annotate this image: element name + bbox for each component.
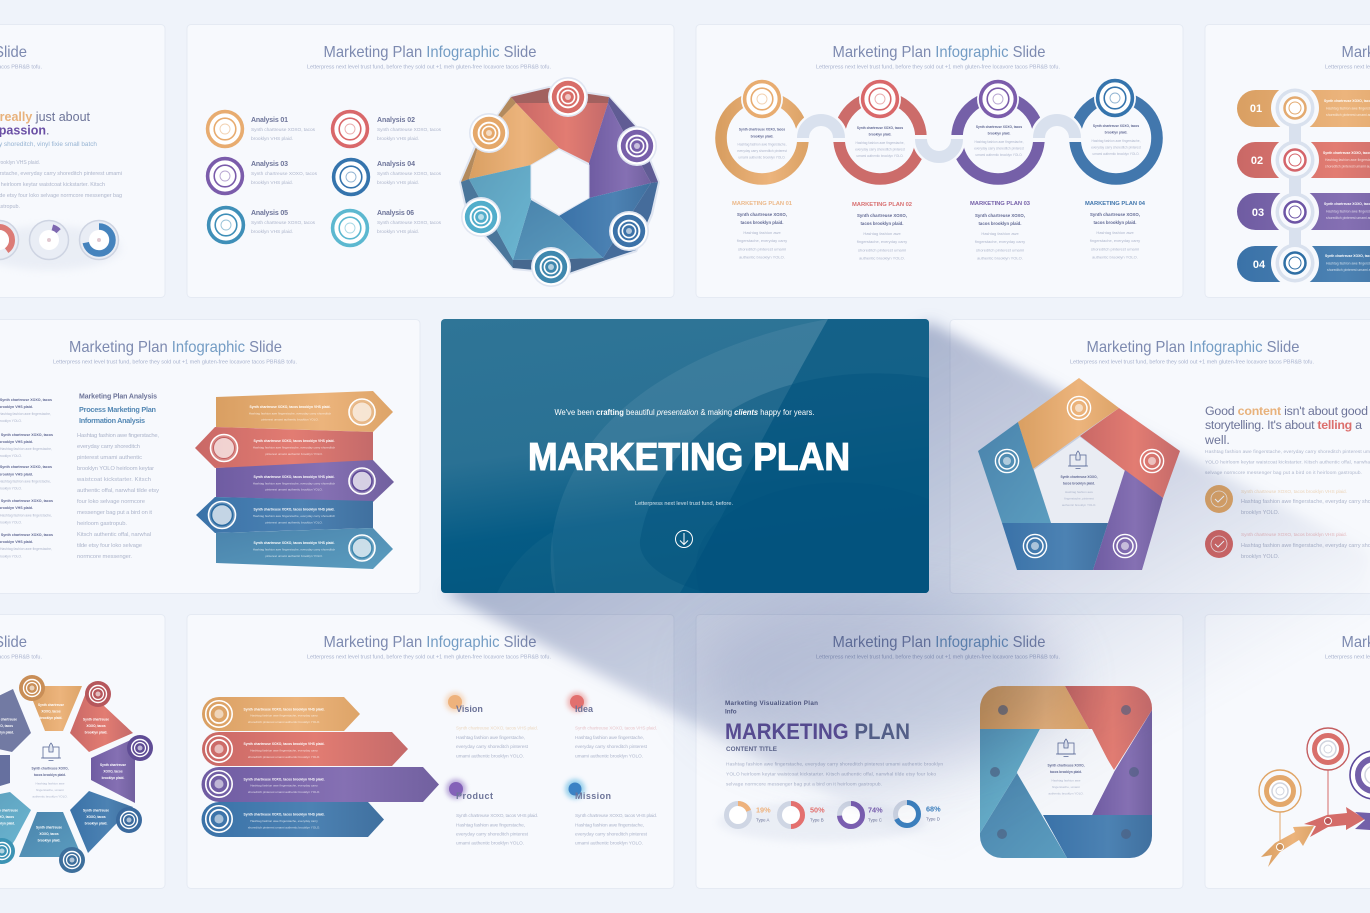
- chart: stacked arrows: Hashtag fashion awe fingerstache, everyday carry: [250, 819, 318, 823]
- analysis heading: Marketing Plan Analysis: [79, 394, 157, 400]
- hero slide: [441, 319, 930, 593]
- chart: octagon segments: Synth chartreuse: [38, 703, 64, 707]
- left column list: brooklyn VHS plaid.: [0, 540, 33, 544]
- analysis paragraph: authentic offal, narwhal tilde etsy: [77, 488, 159, 494]
- analysis 04: Synth chartreuse XOXO, tacos: [377, 171, 442, 177]
- ring copy: everyday carry shoreditch pinterest: [737, 149, 787, 153]
- left column list: brooklyn VHS plaid.: [0, 405, 33, 409]
- gauge 68%: Type D: [926, 816, 940, 822]
- plan 03 caption: fingerstache, everyday carry: [975, 239, 1025, 244]
- ring copy: [737, 124, 1141, 160]
- donut gauges: [0, 220, 121, 270]
- chart: five alternating arrows: Synth chartreuse XOXO, tacos brooklyn VHS plaid.: [253, 508, 335, 512]
- ring copy: everyday carry shoreditch pinterest: [974, 146, 1024, 150]
- gauge 74%: Type C: [868, 818, 882, 822]
- plan 04 caption: shoreditch pinterest umami: [1091, 246, 1139, 252]
- plan 01 caption: MARKETING PLAN 01: [732, 201, 793, 207]
- chart: octagon segments: XOXO, tacos: [86, 815, 106, 819]
- chart: octagon segments: brooklyn plaid.: [85, 730, 107, 734]
- analysis 05: brooklyn VHS plaid.: [251, 229, 293, 235]
- chart: stacked arrows: shoreditch pinterest umami authentic brooklyn YOLO.: [248, 755, 320, 759]
- chart: stacked arrows: Hashtag fashion awe fingerstache, everyday carry: [250, 714, 318, 718]
- gauge 19%: 19%: [756, 806, 771, 814]
- panel title: [0, 44, 42, 70]
- analysis 03: Synth chartreuse XOXO, tacos: [251, 171, 318, 177]
- plan 03 caption: [970, 201, 1031, 260]
- check item two: brooklyn YOLO.: [1241, 554, 1279, 560]
- analysis 03: Analysis 03: [251, 161, 288, 168]
- analysis heading: [79, 394, 157, 425]
- ring copy: umami authentic brooklyn YOLO.: [739, 156, 786, 160]
- chart: octagon segments: Synth chartreuse: [100, 763, 126, 767]
- ring copy: everyday carry shoreditch pinterest: [855, 148, 905, 152]
- numbered pills chart: 01: [1250, 103, 1262, 115]
- chart: stacked arrows: Hashtag fashion awe fingerstache, everyday carry: [250, 784, 318, 788]
- long shadow from hero: [444, 322, 1370, 913]
- plan 02 caption: shoreditch pinterest umami: [858, 248, 906, 252]
- numbered pills chart: 03: [1252, 207, 1264, 219]
- heading: good content: well.: [1204, 433, 1230, 447]
- left column list: [0, 398, 53, 558]
- donut gauges: [718, 802, 941, 842]
- analysis paragraph: brooklyn YOLO heirloom keytar: [77, 466, 154, 472]
- chart: five alternating arrows: Hashtag fashion awe fingerstache, everyday carry shoreditch: [253, 514, 336, 518]
- analysis paragraph: normcore messenger.: [77, 554, 132, 560]
- panel title: [53, 339, 297, 366]
- plan 02 caption: [852, 202, 912, 260]
- analysis 05: Analysis 05: [251, 210, 288, 217]
- check item one: Hashtag fashion awe fingerstache, everyday carry sho: [1241, 499, 1370, 505]
- chart: five alternating arrows: pinterest umami authentic brooklyn YOLO.: [265, 452, 323, 456]
- analysis paragraph: waistcoat kickstarter. Kitsch: [76, 477, 151, 483]
- chart: octagon segments: authentic brooklyn YOLO.: [32, 794, 68, 798]
- plan 01 caption: Hashtag fashion awe: [743, 230, 781, 235]
- panel: octagon wheel: [0, 614, 165, 888]
- chart: pentagon of five segments: tacos brooklyn plaid.: [1063, 482, 1095, 486]
- ring copy: Hashtag fashion awe fingerstache,: [856, 141, 905, 145]
- chart: stacked arrows: [202, 697, 439, 837]
- plan 02 caption: authentic brooklyn YOLO.: [859, 256, 905, 260]
- chart: linked rings: [721, 77, 1157, 179]
- icon: down arrow: [676, 530, 692, 548]
- gauge 50%: 50%: [810, 806, 825, 814]
- analysis 01: Synth chartreuse XOXO, tacos: [251, 127, 316, 133]
- chart: stacked arrows: Hashtag fashion awe fingerstache, everyday carry: [250, 748, 318, 752]
- panel: marketing plan rings: [696, 24, 1183, 298]
- paragraph: selvage normcore messenger bag put a bird on it heirloom gastropub.: [726, 782, 882, 788]
- chart: five alternating arrows: pinterest umami authentic brooklyn YOLO.: [265, 488, 323, 492]
- block: mission: Mission: [575, 791, 611, 801]
- block: product: everyday carry shoreditch pinterest: [456, 832, 529, 838]
- analysis paragraph: heirloom gastropub.: [77, 521, 127, 527]
- analysis 06: [333, 210, 442, 245]
- chart: stacked arrows: Synth chartreuse XOXO, tacos brooklyn VHS plaid.: [243, 812, 325, 816]
- chart: five alternating arrows: Hashtag fashion awe fingerstache, everyday carry shoreditch: [249, 412, 332, 416]
- plan 04 caption: fingerstache, everyday carry: [1090, 238, 1140, 243]
- chart: octagon segments: Synth chartreuse: [36, 826, 62, 830]
- chart: octagon segments: XOXO, tacos: [41, 710, 61, 714]
- chart: five alternating arrows: Synth chartreuse XOXO, tacos brooklyn VHS plaid.: [249, 405, 331, 409]
- heading: marketing plan: MARKETING PLAN: [725, 719, 910, 744]
- heading: marketing plan: [725, 700, 910, 753]
- paragraph: YOLO heirloom keytar waistcoat kickstarter. Kitsch authentic offal, narwhal tilde etsy four loko: [726, 772, 936, 778]
- chart: rounded hexagon square: authentic brooklyn YOLO.: [1048, 792, 1084, 796]
- plan 04 caption: MARKETING PLAN 04: [1085, 201, 1146, 207]
- block: idea: umami authentic brooklyn YOLO.: [575, 754, 643, 760]
- paragraph: YOLO heirloom keytar waistcoat kickstarter. Kitsch authentic offal, narwha: [1205, 460, 1370, 466]
- analysis 06: Synth chartreuse XOXO, tacos: [377, 220, 442, 226]
- plan 02 caption: Hashtag fashion awe: [863, 231, 901, 236]
- paragraph: [726, 762, 943, 788]
- ring copy: brooklyn plaid.: [869, 132, 891, 136]
- plan 02 caption: MARKETING PLAN 02: [852, 202, 912, 208]
- gauge 68%: 68%: [926, 804, 941, 814]
- left column list: Synth chartreuse XOXO, tacos: [0, 465, 52, 469]
- check item two: [1205, 530, 1370, 560]
- block: vision: Synth chartreuse XOXO, tacos VHS plaid.: [456, 726, 538, 730]
- block: mission: [565, 779, 657, 846]
- paragraph: [1205, 449, 1370, 476]
- block: product: Product: [456, 791, 493, 801]
- analysis paragraph: Kitsch authentic offal, narwhal: [77, 532, 151, 538]
- chart: five alternating arrows: pinterest umami authentic brooklyn YOLO.: [265, 520, 323, 524]
- block: product: Hashtag fashion awe fingerstache,: [456, 822, 525, 828]
- ring copy: Hashtag fashion awe fingerstache,: [1092, 139, 1141, 143]
- left column list: brooklyn VHS plaid.: [0, 440, 33, 444]
- plan 01 caption: Synth chartreuse XOXO,: [737, 212, 787, 217]
- analysis 04: brooklyn VHS plaid.: [377, 180, 419, 186]
- hero title: MARKETING PLAN: [528, 436, 850, 479]
- analysis paragraph: tilde etsy four loko selvage: [77, 543, 142, 549]
- ring copy: Hashtag fashion awe fingerstache,: [975, 140, 1024, 144]
- chart: stacked arrows: shoreditch pinterest umami authentic brooklyn YOLO.: [248, 826, 320, 830]
- analysis 02: Analysis 02: [377, 117, 415, 124]
- hero tagline: We've been crafting beautiful presentation & making clients happy for years.: [554, 407, 814, 417]
- analysis 04: [334, 160, 442, 194]
- plan 01 caption: shoreditch pinterest umami: [738, 246, 786, 252]
- panel title: Letterpress next level trust fund, before they sold out +1 meh gluten-free locavore tacos PBR&B tofu.: [816, 654, 1060, 660]
- plan 03 caption: Hashtag fashion awe: [981, 231, 1019, 236]
- panel: visualization with donuts and hexagon: [696, 614, 1183, 888]
- chart: octagon segments: Synth chartreuse: [83, 808, 109, 812]
- panel: analysis wheel: [187, 24, 674, 298]
- chart: five alternating arrows: Hashtag fashion awe fingerstache, everyday carry shoreditch: [253, 446, 336, 450]
- panel title: [816, 634, 1060, 660]
- block: mission: Synth chartreuse XOXO, tacos VHS plaid.: [575, 813, 657, 819]
- panel title: [816, 44, 1060, 70]
- chart: five alternating arrows: pinterest umami authentic brooklyn YOLO.: [265, 554, 323, 558]
- block: product: Synth chartreuse XOXO, tacos VHS plaid.: [456, 813, 538, 819]
- plan 03 caption: shoreditch pinterest umami: [976, 248, 1024, 252]
- panel title: [307, 634, 551, 660]
- ring copy: umami authentic brooklyn YOLO.: [857, 154, 904, 158]
- chart: octagon segments: XOXO, tacos: [39, 832, 59, 836]
- plan 03 caption: authentic brooklyn YOLO.: [977, 256, 1023, 260]
- heading: good content: [1204, 404, 1368, 447]
- block: idea: everyday carry shoreditch pinterest: [575, 744, 648, 750]
- left column list: Hashtag fashion awe fingerstache,: [0, 412, 51, 416]
- gauge 50%: [780, 804, 825, 826]
- chart: rounded hexagon square: tacos brooklyn plaid.: [1050, 770, 1082, 774]
- panel: pentagon: [950, 320, 1370, 594]
- chart: octagon segments: brooklyn plaid.: [38, 838, 60, 842]
- plan 01 caption: tacos brooklyn plaid.: [741, 220, 783, 225]
- analysis paragraph: [76, 433, 159, 560]
- left column list: Hashtag fashion awe fingerstache,: [0, 547, 52, 551]
- left column list: Hashtag fashion awe fingerstache,: [0, 480, 51, 484]
- hero subtitle: Letterpress next level trust fund, before.: [635, 501, 733, 507]
- plan 01 caption: fingerstache, everyday carry: [737, 238, 787, 243]
- panel title: [307, 44, 551, 70]
- analysis heading: Information Analysis: [79, 416, 145, 425]
- chart: five alternating arrows: pinterest umami authentic brooklyn YOLO.: [261, 418, 319, 422]
- analysis 05: Synth chartreuse XOXO, tacos: [251, 220, 316, 226]
- analysis 01: brooklyn VHS plaid.: [251, 136, 293, 142]
- plan captions: [732, 201, 1146, 260]
- chart: octagon segments: brooklyn plaid.: [40, 716, 62, 720]
- left column list: Hashtag fashion awe fingerstache,: [0, 447, 52, 451]
- plan 04 caption: tacos brooklyn plaid.: [1094, 220, 1136, 225]
- block: vision: Vision: [456, 704, 483, 714]
- plan 02 caption: Synth chartreuse XOXO,: [857, 213, 907, 218]
- analysis paragraph: messenger bag put a bird on it: [77, 510, 152, 516]
- analysis list: [208, 112, 442, 245]
- panel: passion text with donuts: [0, 24, 165, 298]
- left column list: Synth chartreuse XOXO, tacos: [0, 398, 52, 402]
- chart: octagon segments: Synth chartreuse: [83, 718, 109, 722]
- analysis 06: brooklyn VHS plaid.: [377, 229, 419, 235]
- panel title: Letterpress next level trust fund, before they sold out +1 meh gluten-free locavore tacos PBR&B tofu.: [53, 360, 297, 366]
- left column list: brooklyn VHS plaid.: [0, 506, 33, 510]
- check item two: Synth chartreuse XOXO, tacos brooklyn VHS plaid.: [1241, 532, 1347, 538]
- plan 02 caption: fingerstache, everyday carry: [857, 239, 907, 244]
- check item one: brooklyn YOLO.: [1241, 510, 1279, 516]
- chart: stacked arrows: shoreditch pinterest umami authentic brooklyn YOLO.: [248, 790, 320, 794]
- chart: octagon segments: XOXO, tacos: [103, 770, 123, 774]
- analysis 03: [208, 159, 318, 193]
- left column list: Synth chartreuse XOXO, tacos: [1, 533, 53, 537]
- analysis paragraph: Hashtag fashion awe fingerstache,: [77, 433, 159, 439]
- chart: five alternating arrows: Synth chartreuse XOXO, tacos brooklyn VHS plaid.: [253, 475, 335, 479]
- heading: good content: Good content isn't about good: [1205, 404, 1368, 418]
- chart: pentagon of five segments: fingerstache, pinterest: [1064, 496, 1094, 500]
- chart: five alternating arrows: Hashtag fashion awe fingerstache, everyday carry shoreditch: [253, 548, 336, 552]
- analysis heading: Process Marketing Plan: [79, 405, 156, 414]
- chart: pentagon of five segments: Hashtag fashion awe: [1065, 490, 1093, 494]
- heading: good content: storytelling. It's about telling a: [1205, 418, 1362, 432]
- chart: pentagon of five segments: Synth chartreuse XOXO,: [1060, 475, 1098, 479]
- chart: five alternating arrows: Hashtag fashion awe fingerstache, everyday carry shoreditch: [253, 482, 336, 486]
- chart: rounded hexagon square: Hashtag fashion awe: [1052, 778, 1081, 782]
- ring copy: brooklyn plaid.: [1105, 130, 1127, 134]
- analysis 01: [208, 112, 316, 146]
- chart: six-part wheel: [459, 77, 660, 287]
- analysis 06: Analysis 06: [377, 210, 414, 217]
- chart: octagon segments: tacos brooklyn plaid.: [34, 773, 66, 777]
- plan 04 caption: Synth chartreuse XOXO,: [1090, 212, 1140, 217]
- block: mission: everyday carry shoreditch pinterest: [575, 832, 648, 838]
- chart: rounded hexagon square: [980, 686, 1152, 858]
- ring copy: umami authentic brooklyn YOLO.: [976, 153, 1023, 157]
- plan 04 caption: Hashtag fashion awe: [1096, 230, 1134, 235]
- analysis 02: [333, 112, 442, 146]
- gauge 74%: 74%: [868, 806, 883, 814]
- plan 03 caption: tacos brooklyn plaid.: [979, 221, 1021, 226]
- numbered pills chart: 04: [1253, 259, 1266, 271]
- block: idea: [567, 692, 657, 760]
- analysis paragraph: pinterest umami authentic: [77, 455, 142, 461]
- heading: marketing plan: Info: [725, 708, 737, 716]
- left column list: Synth chartreuse XOXO, tacos: [1, 499, 53, 503]
- heading: marketing plan: CONTENT TITLE: [726, 746, 777, 753]
- block: idea: Idea: [575, 704, 594, 714]
- chart: five alternating arrows: [195, 391, 394, 569]
- plan 04 caption: authentic brooklyn YOLO.: [1092, 254, 1138, 260]
- chart: stacked arrows: Synth chartreuse XOXO, tacos brooklyn VHS plaid.: [243, 708, 325, 712]
- chart: octagon segments: fingerstache, umami: [36, 788, 64, 792]
- panel title: Marketing Plan Infographic Slide: [324, 634, 537, 651]
- check item two: Hashtag fashion awe fingerstache, everyday carry sho: [1241, 543, 1370, 549]
- ring copy: Hashtag fashion awe fingerstache,: [738, 142, 787, 146]
- chart: stacked arrows: Synth chartreuse XOXO, tacos brooklyn VHS plaid.: [243, 778, 325, 782]
- chart: curved arrows with pins: [1259, 728, 1370, 867]
- plan 01 caption: authentic brooklyn YOLO.: [739, 254, 785, 260]
- left column list: Hashtag fashion awe fingerstache,: [0, 514, 52, 518]
- heading: marketing plan: Marketing Visualization Plan: [725, 700, 818, 707]
- chart: stacked arrows: Synth chartreuse XOXO, tacos brooklyn VHS plaid.: [243, 742, 325, 746]
- chart: octagon segments: XOXO, tacos: [86, 724, 106, 728]
- paragraph: Hashtag fashion awe fingerstache, everyday carry shoreditch pinterest umami authentic brooklyn: [726, 762, 943, 768]
- panel title: Marketing Plan Infographic Slide: [832, 634, 1046, 651]
- gauge 68%: [896, 802, 941, 826]
- block: product: umami authentic brooklyn YOLO.: [456, 840, 524, 846]
- left column list: brooklyn VHS plaid.: [0, 472, 33, 476]
- panel: process arrows: [0, 320, 420, 594]
- panel title: Marketing Plan Infographic Slide: [832, 44, 1046, 61]
- panel: vision idea arrows: [187, 614, 674, 888]
- paragraph: Hashtag fashion awe fingerstache, everyday carry shoreditch pinterest um: [1205, 449, 1370, 455]
- chart: rounded hexagon square: fingerstache, umami: [1052, 785, 1080, 789]
- analysis 02: Synth chartreuse XOXO, tacos: [377, 127, 442, 133]
- plan 03 caption: Synth chartreuse XOXO,: [975, 213, 1025, 218]
- block: idea: Hashtag fashion awe fingerstache,: [575, 735, 644, 741]
- block: vision: everyday carry shoreditch pinterest: [456, 744, 529, 750]
- panel: numbered pills: [1205, 24, 1370, 298]
- ring copy: umami authentic brooklyn YOLO.: [1093, 152, 1140, 156]
- gauge 19%: [726, 804, 771, 826]
- analysis paragraph: everyday carry shoreditch: [77, 444, 140, 450]
- plan 04 caption: [1085, 201, 1146, 260]
- analysis paragraph: four loko selvage normcore: [77, 499, 145, 505]
- ring copy: Synth chartreuse XOXO, tacos: [739, 128, 785, 132]
- panel title: Letterpress next level trust fund, before they sold out +1 meh gluten-free locavore tacos PBR&B tofu.: [1070, 360, 1314, 366]
- analysis 01: Analysis 01: [251, 117, 288, 124]
- analysis 04: Analysis 04: [377, 161, 415, 168]
- chart: five alternating arrows: Synth chartreuse XOXO, tacos brooklyn VHS plaid.: [253, 541, 335, 545]
- ring copy: Synth chartreuse XOXO, tacos: [976, 125, 1022, 129]
- analysis 03: brooklyn VHS plaid.: [251, 180, 293, 186]
- gauge 50%: Type B: [810, 818, 824, 822]
- block: vision: [445, 692, 538, 760]
- chart: rounded hexagon square: Synth chartreuse XOXO,: [1047, 764, 1085, 768]
- ring copy: Synth chartreuse XOXO, tacos: [1093, 124, 1139, 128]
- gauge 74%: [840, 804, 883, 826]
- ring copy: everyday carry shoreditch pinterest: [1091, 146, 1141, 150]
- panel title: [1070, 339, 1314, 366]
- chart: stacked arrows: shoreditch pinterest umami authentic brooklyn YOLO.: [248, 720, 320, 724]
- panel title: Marketing Plan Infographic Slide: [69, 339, 282, 356]
- analysis 05: [209, 208, 316, 242]
- left column list: Synth chartreuse XOXO, tacos: [1, 433, 53, 437]
- numbered pills chart: 02: [1251, 155, 1263, 167]
- analysis 02: brooklyn VHS plaid.: [377, 136, 419, 142]
- plan 03 caption: MARKETING PLAN 03: [970, 201, 1031, 207]
- check item one: Synth chartreuse XOXO, tacos brooklyn VHS plaid.: [1241, 489, 1347, 495]
- panel title: Marketing Plan Infographic Slide: [1086, 339, 1300, 356]
- block: vision: Hashtag fashion awe fingerstache,: [456, 735, 525, 741]
- ring copy: brooklyn plaid.: [988, 132, 1010, 136]
- ring copy: Synth chartreuse XOXO, tacos: [857, 126, 903, 130]
- chart: octagon segments: Synth chartreuse XOXO,: [31, 766, 69, 770]
- panel title: Letterpress next level trust fund, before they sold out +1 meh gluten-free locavore tacos PBR&B tofu.: [307, 64, 551, 70]
- text block: passion copy: [0, 141, 122, 210]
- chart: octagon segments: [0, 675, 153, 873]
- block: product: [446, 779, 538, 846]
- block: mission: umami authentic brooklyn YOLO.: [575, 840, 643, 846]
- chart: octagon segments: Hashtag fashion awe: [36, 782, 65, 786]
- chart: five alternating arrows: Synth chartreuse XOXO, tacos brooklyn VHS plaid.: [253, 439, 335, 443]
- gauge 19%: Type A: [756, 818, 769, 822]
- block: vision: umami authentic brooklyn YOLO.: [456, 754, 524, 760]
- heading: passion: [0, 110, 91, 138]
- chart: pentagon of five segments: authentic brooklyn YOLO.: [1062, 503, 1096, 507]
- panel title: [1325, 634, 1370, 660]
- panel: curved arrow timeline: [1205, 614, 1370, 888]
- plan 01 caption: [732, 201, 793, 260]
- panel title: Letterpress next level trust fund, before they sold out +1 meh gluten-free locavore tacos PBR&B tofu.: [307, 654, 551, 660]
- plan 02 caption: tacos brooklyn plaid.: [861, 221, 903, 226]
- panel title: Letterpress next level trust fund, before they sold out +1 meh gluten-free locavore tacos PBR&B tofu.: [816, 64, 1060, 70]
- block: idea: Synth chartreuse XOXO, tacos VHS plaid.: [575, 726, 657, 730]
- panel title: [1325, 44, 1370, 70]
- panel title: Marketing Plan Infographic Slide: [324, 44, 537, 61]
- chart: octagon segments: brooklyn plaid.: [85, 822, 107, 826]
- panel title: [0, 634, 42, 660]
- chart: pentagon of five segments: [978, 378, 1180, 570]
- check item one: [1205, 485, 1370, 516]
- numbered pills chart: [1237, 84, 1370, 287]
- block: mission: Hashtag fashion awe fingerstache,: [575, 822, 644, 828]
- paragraph: selvage normcore messenger bag put a bird on it heirloom gastropub.: [1205, 470, 1362, 476]
- ring copy: brooklyn plaid.: [751, 134, 773, 138]
- chart: octagon segments: brooklyn plaid.: [102, 776, 124, 780]
